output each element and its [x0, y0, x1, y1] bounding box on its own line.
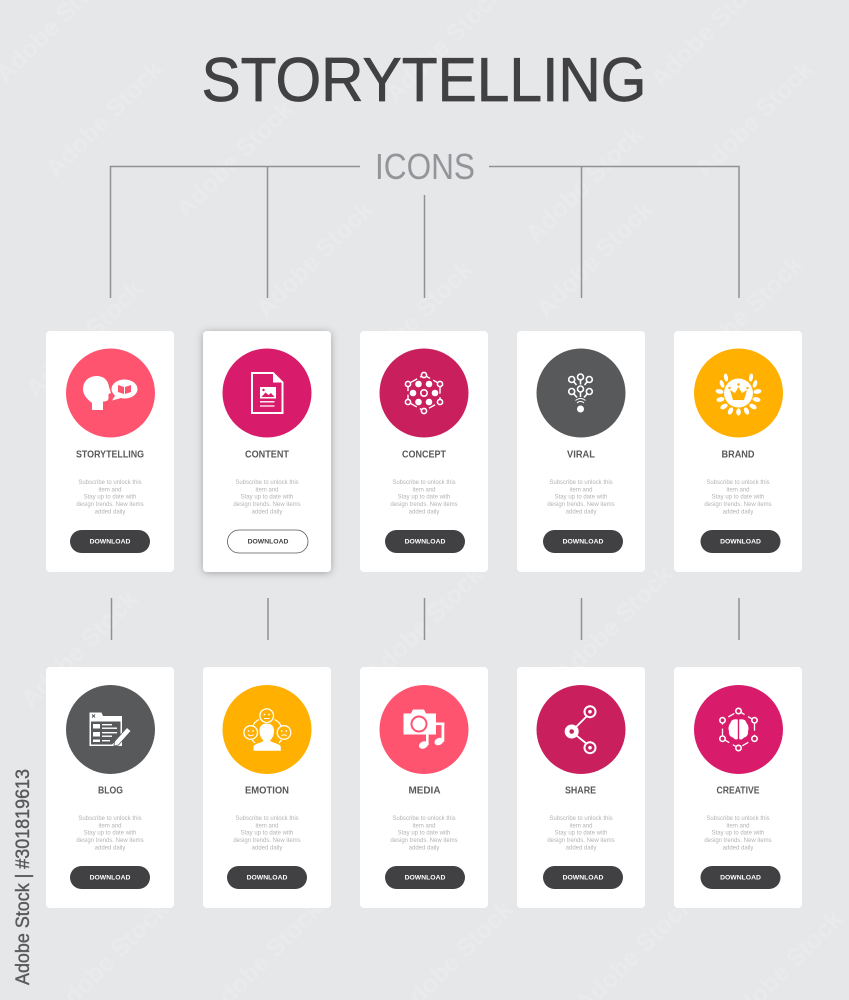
button: DOWNLOAD	[720, 874, 761, 882]
watermark pattern: Adobe Stock	[15, 585, 143, 713]
button: DOWNLOAD	[563, 874, 603, 882]
watermark pattern: Adobe Stock	[40, 55, 168, 183]
description	[233, 480, 301, 515]
panel: content (highlighted)	[203, 331, 331, 572]
description: added daily	[723, 509, 753, 515]
panel: concept	[360, 331, 488, 572]
watermark pattern: Adobe Stock	[360, 560, 488, 688]
description: Subscribe to unlock this	[78, 816, 142, 822]
label: SHARE	[565, 786, 596, 796]
description: Stay up to date with	[398, 495, 450, 501]
icon: document with image	[252, 373, 282, 413]
panel: share	[517, 667, 645, 908]
watermark pattern: Adobe Stock	[20, 275, 148, 403]
description: design trends. New items	[76, 502, 144, 508]
watermark pattern: Adobe Stock	[350, 255, 478, 383]
button	[385, 866, 465, 889]
description: design trends. New items	[233, 838, 301, 844]
button	[700, 530, 780, 553]
description: item and	[726, 487, 750, 493]
connector lines: between rows	[112, 598, 739, 640]
icon: head with speech bubble and book	[83, 376, 138, 410]
watermark pattern: Adobe Stock	[530, 195, 658, 323]
icon: brain in network hexagon	[720, 708, 757, 751]
button: DOWNLOAD	[720, 538, 761, 546]
panel: brand	[674, 331, 802, 572]
description: item and	[98, 823, 122, 829]
button	[543, 866, 623, 889]
button	[700, 866, 780, 889]
description: Stay up to date with	[712, 831, 764, 837]
description: Stay up to date with	[84, 831, 136, 837]
description: Subscribe to unlock this	[235, 480, 299, 486]
description: design trends. New items	[390, 838, 458, 844]
watermark pattern: Adobe Stock	[690, 55, 818, 183]
description: item and	[412, 487, 436, 493]
description: Subscribe to unlock this	[706, 480, 770, 486]
description	[233, 816, 301, 851]
description: item and	[98, 487, 122, 493]
watermark pattern: Adobe Stock	[550, 560, 678, 688]
description: Subscribe to unlock this	[549, 480, 613, 486]
label: BRAND	[722, 450, 754, 460]
description: added daily	[409, 845, 439, 851]
description: added daily	[409, 509, 439, 515]
description: Subscribe to unlock this	[549, 816, 613, 822]
icon: network hexagon	[405, 372, 443, 414]
button	[70, 866, 150, 889]
panel: emotion	[203, 667, 331, 908]
description: Stay up to date with	[398, 831, 450, 837]
icon: camera and music notes	[404, 710, 445, 750]
icon: viral spreading nodes	[569, 374, 592, 412]
label: STORYTELLING	[76, 450, 144, 460]
label: BLOG	[98, 786, 123, 796]
description: added daily	[566, 509, 596, 515]
description: added daily	[95, 845, 125, 851]
button: DOWNLOAD	[90, 874, 130, 882]
description: item and	[412, 823, 436, 829]
description	[76, 816, 144, 851]
description	[704, 816, 772, 851]
description: Stay up to date with	[555, 495, 607, 501]
label: EMOTION	[245, 786, 289, 796]
description: Stay up to date with	[241, 495, 293, 501]
button	[227, 866, 307, 889]
button: DOWNLOAD	[90, 538, 130, 546]
label: VIRAL	[567, 450, 595, 460]
button	[70, 530, 150, 553]
label: CONCEPT	[402, 450, 446, 460]
description: design trends. New items	[390, 502, 458, 508]
subtitle: icons: ICONS	[375, 146, 475, 187]
icon: blog window with pencil	[90, 712, 131, 746]
description: Subscribe to unlock this	[392, 480, 456, 486]
description: design trends. New items	[233, 502, 301, 508]
icon: share nodes	[565, 706, 596, 753]
watermark pattern: Adobe Stock	[680, 250, 808, 378]
watermark pattern: Adobe Stock	[520, 120, 648, 248]
panel: media	[360, 667, 488, 908]
description: Stay up to date with	[555, 831, 607, 837]
description: Subscribe to unlock this	[78, 480, 142, 486]
description: item and	[569, 823, 593, 829]
description: design trends. New items	[547, 502, 615, 508]
watermark pattern: Adobe Stock	[170, 95, 298, 223]
description: design trends. New items	[704, 838, 772, 844]
button	[543, 530, 623, 553]
label: MEDIA	[408, 786, 440, 796]
icon: person with emotion faces	[244, 709, 291, 751]
description: added daily	[566, 845, 596, 851]
description: design trends. New items	[704, 502, 772, 508]
description: Subscribe to unlock this	[392, 816, 456, 822]
stock credit: vertical text: Adobe Stock | #301819613	[13, 769, 34, 985]
description	[704, 480, 772, 515]
button: DOWNLOAD	[247, 874, 287, 882]
description: Stay up to date with	[712, 495, 764, 501]
description: Subscribe to unlock this	[706, 816, 770, 822]
panel: storytelling	[46, 331, 174, 572]
description: Stay up to date with	[84, 495, 136, 501]
button: outlined	[228, 530, 308, 553]
description	[390, 480, 458, 515]
description: item and	[726, 823, 750, 829]
description: added daily	[723, 845, 753, 851]
description	[76, 480, 144, 515]
panel: viral	[517, 331, 645, 572]
button: DOWNLOAD	[563, 538, 603, 546]
description	[547, 480, 615, 515]
description: added daily	[95, 509, 125, 515]
description: Stay up to date with	[241, 831, 293, 837]
label: CONTENT	[245, 450, 289, 460]
description: item and	[255, 487, 279, 493]
description: design trends. New items	[76, 838, 144, 844]
connector lines: top row	[110, 166, 739, 298]
button: DOWNLOAD	[405, 538, 445, 546]
description: Subscribe to unlock this	[235, 816, 299, 822]
title: STORYTELLING	[202, 46, 646, 115]
watermark pattern: Adobe Stock	[250, 195, 378, 323]
description	[390, 816, 458, 851]
panel: creative	[674, 667, 802, 908]
description: added daily	[252, 509, 282, 515]
button	[385, 530, 465, 553]
description: item and	[569, 487, 593, 493]
description: design trends. New items	[547, 838, 615, 844]
description: added daily	[252, 845, 282, 851]
panel: blog	[46, 667, 174, 908]
description	[547, 816, 615, 851]
label: CREATIVE	[716, 786, 760, 796]
icon: crown with laurel	[715, 373, 762, 416]
button: DOWNLOAD	[405, 874, 445, 882]
button: outlined: DOWNLOAD	[248, 538, 288, 546]
description: item and	[255, 823, 279, 829]
